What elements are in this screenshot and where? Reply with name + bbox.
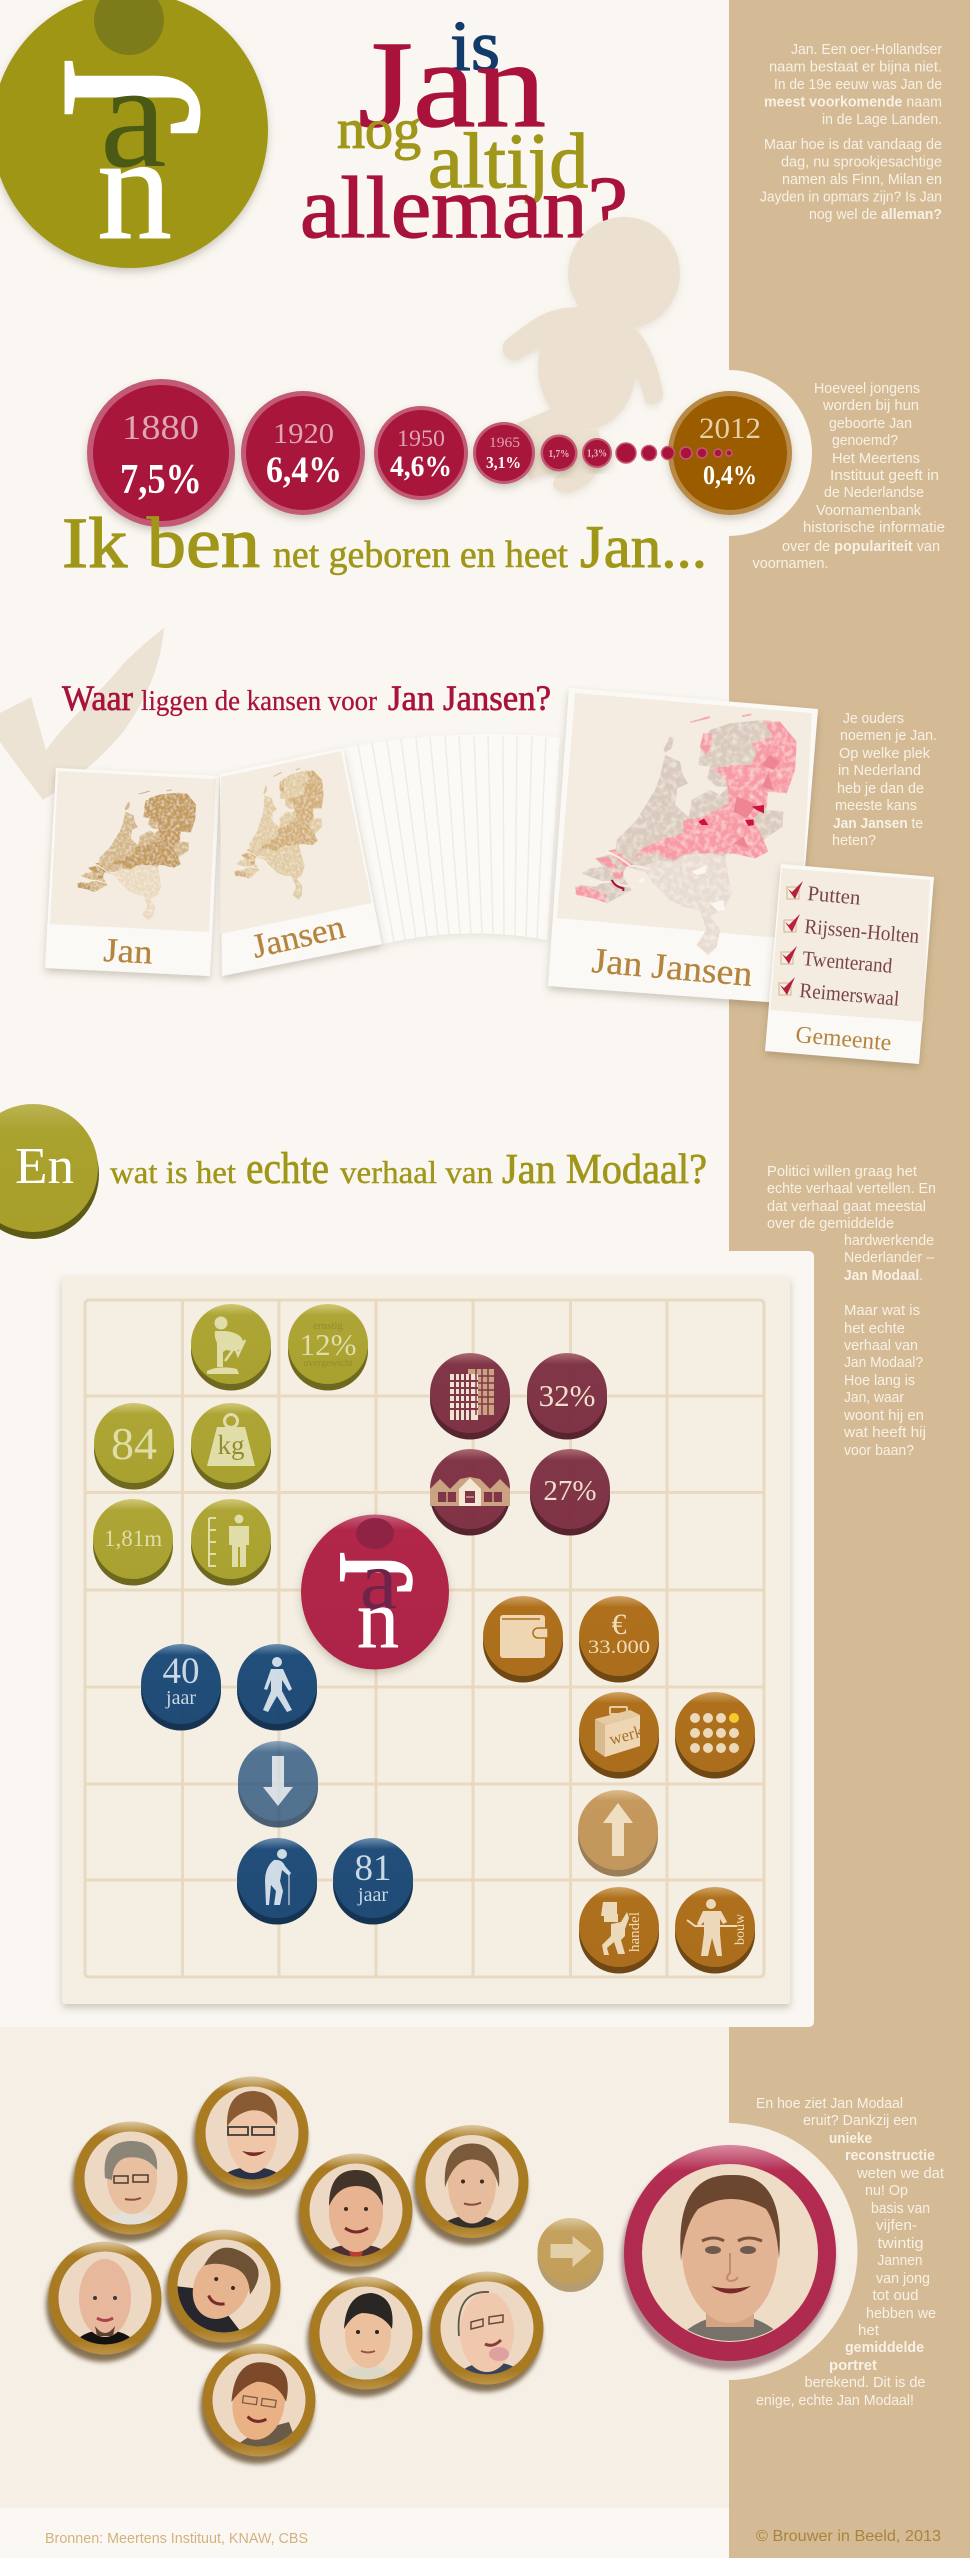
- Jan Modaal text: voor baan?: [844, 1442, 914, 1459]
- bubble 1965: 1965: [489, 435, 520, 451]
- heading: Ik ben net geboren: Ik ben: [62, 503, 260, 583]
- token: 81 jaar: 81: [354, 1848, 392, 1889]
- title: [300, 6, 628, 257]
- title: alleman?: [300, 160, 628, 257]
- map card: Jan Jansen: [548, 688, 818, 1004]
- portrait 1: grey-haired man with glasses: [72, 2122, 188, 2248]
- token: 12% ernstig overgewicht: overgewicht: [303, 1358, 353, 1369]
- chance text: meeste kans: [835, 797, 917, 814]
- heading: wat is het echte verhaal: wat is het: [110, 1154, 236, 1190]
- chance text: Je ouders: [843, 710, 904, 727]
- birth text: worden bij hun: [822, 397, 919, 414]
- portrait text: Jannen: [878, 2252, 922, 2269]
- heading: wat is het echte verhaal: echte: [246, 1144, 329, 1193]
- bubble 1,3%: 1,3%: [587, 448, 607, 460]
- heading: Ik ben net geboren: Jan...: [580, 514, 707, 580]
- intro text: [760, 41, 942, 223]
- Jan Modaal text: Jan Modaal?: [844, 1354, 923, 1371]
- bubble 1965: [473, 422, 535, 484]
- Jan Modaal text: verhaal van: [844, 1337, 918, 1354]
- token: bouw: [675, 1887, 755, 1974]
- card: Gemeente checklist: [765, 864, 934, 1064]
- token: 1,81m: 1,81m: [104, 1526, 162, 1551]
- map: Jan Jansen municipalities: [575, 714, 797, 955]
- chance text: Jan Jansen te: [833, 815, 923, 832]
- portrait text: nu! Op: [865, 2182, 908, 2199]
- portrait text: [756, 2095, 945, 2409]
- token: big Jan: [301, 1514, 449, 1670]
- token: handel: [579, 1887, 659, 1974]
- map card: Jansen: [220, 748, 382, 976]
- portrait 8: older bald man with glasses: [428, 2272, 544, 2394]
- portrait text: eruit? Dankzij een: [803, 2112, 917, 2129]
- birth text: over de populariteit van: [782, 538, 940, 555]
- Jan Modaal text: Politici willen graag het: [767, 1163, 918, 1180]
- Jan Modaal text: Jan Modaal.: [844, 1267, 923, 1284]
- bubble 1950: 1950: [397, 426, 445, 451]
- card: Gemeente checklist: Twenterand: [802, 946, 894, 978]
- Jan logo circle: a: [100, 33, 167, 199]
- bubble 2012: [668, 391, 792, 515]
- Jan Modaal text: dat verhaal gaat meestal: [767, 1198, 926, 1215]
- token: kg weight: kg: [218, 1430, 244, 1460]
- token: 32%: 32%: [539, 1378, 595, 1413]
- bubble 1920: [241, 391, 365, 515]
- token: income: [579, 1596, 659, 1682]
- token: 32%: [527, 1353, 607, 1440]
- token: werk briefcase: werk: [607, 1722, 645, 1749]
- Jan Modaal text: echte verhaal vertellen. En: [767, 1180, 936, 1197]
- portrait 2: young man with glasses: [193, 2076, 308, 2203]
- token: big Jan: n: [357, 1573, 399, 1666]
- token: 84: 84: [111, 1418, 157, 1469]
- Jan Modaal text: Maar wat is: [844, 1302, 920, 1319]
- token: big Jan: a: [360, 1534, 397, 1627]
- portrait 3: smiling man: [297, 2154, 412, 2280]
- side cut-out circle: portrait: [600, 2123, 858, 2380]
- icon: baby silhouette: [502, 217, 680, 493]
- Jan Modaal text: Hoe lang is: [844, 1372, 915, 1389]
- token: big Jan: J: [317, 1551, 435, 1593]
- portrait text: het: [858, 2322, 880, 2339]
- intro text: nog wel de alleman?: [809, 206, 942, 223]
- birth text: Instituut geeft in: [830, 467, 939, 484]
- portrait text: twintig: [878, 2235, 924, 2252]
- intro text: Maar hoe is dat vandaag de: [764, 136, 942, 153]
- intro text: dag, nu sprookjesachtige: [781, 154, 942, 170]
- birth text: de Nederlandse: [824, 484, 924, 501]
- token: 12% ernstig overgewicht: ernstig: [313, 1320, 343, 1332]
- bubble 2012: 2012: [699, 412, 761, 445]
- birth text: genoemd?: [832, 432, 898, 449]
- token: werk briefcase: [579, 1692, 659, 1778]
- icon: check marks: [779, 881, 803, 995]
- side cut-out circle: [646, 370, 812, 536]
- map: Jan distribution: [77, 789, 196, 920]
- portrait 9: man with tie: [200, 2344, 316, 2464]
- intro text: naam bestaat er bijna niet.: [769, 58, 942, 76]
- bubble 2012: 0,4%: [703, 460, 757, 490]
- portrait 7: young dark-haired man: [307, 2276, 422, 2401]
- birth text: Het Meertens: [832, 450, 920, 467]
- label: Gemeente: Gemeente: [794, 1022, 892, 1056]
- token: row houses: [430, 1449, 510, 1536]
- chance text: heten?: [832, 832, 876, 849]
- Jan Modaal text: hardwerkende: [844, 1232, 934, 1249]
- panel: board with grid: [62, 1276, 790, 2004]
- portrait text: berekend. Dit is de: [804, 2374, 926, 2391]
- heading: Ik ben net geboren: net geboren en heet: [273, 534, 568, 576]
- birth text: Hoeveel jongens: [814, 380, 920, 397]
- label: Jan Jansen: Jan Jansen: [590, 940, 754, 994]
- portrait text: vijfen-: [876, 2217, 917, 2234]
- Jan Modaal text: Nederlander –: [844, 1249, 935, 1266]
- title: is: [450, 6, 500, 86]
- title: Jan: [358, 16, 546, 153]
- label: Jansen: Jansen: [248, 909, 348, 966]
- token: belly icon: [191, 1304, 271, 1390]
- token: handel: handel: [627, 1912, 643, 1952]
- portrait text: gemiddelde: [845, 2339, 924, 2356]
- token: arrow up: [578, 1790, 658, 1876]
- bubble 1920: 1920: [273, 418, 334, 450]
- card: Gemeente checklist: Rijssen-Holten: [804, 914, 921, 948]
- Jan logo circle: [0, 0, 268, 271]
- portrait 6: tilted man: [165, 2230, 280, 2350]
- token: kg weight: [191, 1403, 271, 1490]
- arrow token: [538, 2218, 604, 2292]
- bubble 1,3%: [582, 438, 612, 468]
- bubble 1880: [87, 379, 235, 527]
- intro text: meest voorkomende naam: [764, 94, 942, 110]
- intro text: In de 19e eeuw was Jan de: [774, 76, 942, 93]
- token: bouw: bouw: [733, 1913, 748, 1945]
- token: 1,81m: [93, 1499, 173, 1586]
- token: apartment building: [430, 1353, 510, 1440]
- portrait text: En hoe ziet Jan Modaal: [756, 2095, 903, 2112]
- map card: Jan: [45, 768, 220, 976]
- token: 40 jaar: jaar: [165, 1687, 196, 1709]
- chance text: heb je dan de: [837, 780, 924, 797]
- fan of map cards: [343, 734, 560, 944]
- portrait text: van jong: [876, 2270, 930, 2287]
- bubble 1950: [374, 406, 468, 500]
- portrait text: enige, echte Jan Modaal!: [756, 2392, 914, 2409]
- chance text: [832, 710, 937, 849]
- token: walking man: [237, 1644, 317, 1730]
- Jan Modaal text: woont hij en: [843, 1407, 924, 1424]
- En badge: [0, 1104, 99, 1239]
- heading: Waar liggen de kansen: Waar: [62, 678, 133, 718]
- bubble 1965: 3,1%: [486, 453, 521, 472]
- Jan Modaal text: het echte: [844, 1320, 905, 1337]
- portrait text: basis van: [871, 2200, 930, 2217]
- face: [680, 2175, 780, 2341]
- portrait text: portret: [829, 2357, 877, 2374]
- portrait text: weten we dat: [856, 2165, 945, 2182]
- Jan Modaal text: over de gemiddelde: [767, 1215, 894, 1232]
- Jan Modaal text: Jan, waar: [844, 1389, 904, 1406]
- bubble 1920: 6,4%: [266, 450, 342, 491]
- bubble chart: share of boys named Jan: [87, 379, 792, 527]
- chance text: Op welke plek: [839, 745, 930, 762]
- heading: Waar liggen de kansen: [62, 678, 551, 718]
- token: income: 33.000: [588, 1637, 650, 1658]
- intro text: namen als Finn, Milan en: [782, 171, 942, 188]
- title: nog: [337, 99, 421, 161]
- bubble 1,7%: 1,7%: [548, 449, 570, 460]
- white panel: [0, 1251, 814, 2027]
- birth text: historische informatie: [803, 519, 945, 536]
- heading: wat is het echte verhaal: Jan Modaal?: [502, 1147, 707, 1193]
- Jan Modaal text: wat heeft hij: [843, 1424, 926, 1441]
- token: elderly man: [237, 1838, 317, 1924]
- title: altijd: [428, 117, 588, 204]
- icon: background check mark: [0, 628, 164, 800]
- bubble 1,7%: [540, 434, 578, 472]
- heading: Waar liggen de kansen: liggen de kansen voor: [141, 685, 377, 717]
- card: Gemeente checklist: Reimerswaal: [799, 978, 900, 1011]
- token: 81 jaar: jaar: [357, 1884, 388, 1906]
- portrait 4: man with tousled hair: [413, 2125, 528, 2252]
- birth text: geboorte Jan: [829, 415, 912, 432]
- portrait text: hebben we: [866, 2305, 936, 2322]
- intro text: Jayden in opmars zijn? Is Jan: [760, 188, 942, 206]
- token: wallet: [483, 1596, 563, 1682]
- token: employment dots: [675, 1692, 755, 1778]
- footer sources: Bronnen: Meertens Instituut, KNAW, CBS: [45, 2530, 308, 2547]
- heading: Waar liggen de kansen: Jan Jansen?: [388, 678, 551, 718]
- token: 12% ernstig overgewicht: 12%: [300, 1327, 356, 1362]
- label: Jan: Jan: [103, 932, 153, 972]
- map: Jansen distribution: [221, 765, 338, 908]
- token: 12% ernstig overgewicht: [288, 1304, 368, 1390]
- bubble 1880: 7,5%: [120, 457, 202, 503]
- card: Gemeente checklist: Putten: [807, 881, 862, 910]
- heading: Ik ben net geboren: [62, 503, 707, 583]
- Jan logo circle: n: [97, 105, 172, 271]
- token: 27%: 27%: [543, 1475, 597, 1507]
- heading: wat is het echte verhaal: [110, 1144, 707, 1193]
- footer copyright: © Brouwer in Beeld, 2013: [756, 2528, 941, 2545]
- heading: wat is het echte verhaal: verhaal van: [340, 1154, 493, 1190]
- token: 40 jaar: 40: [162, 1651, 200, 1692]
- bubble 1880: 1880: [122, 408, 199, 447]
- chance text: noemen je Jan.: [840, 727, 937, 744]
- Jan logo circle: J: [20, 58, 241, 136]
- portrait text: reconstructie: [845, 2147, 935, 2164]
- portrait text: tot oud: [872, 2287, 918, 2304]
- token: arrow down: [238, 1741, 318, 1828]
- token: income: €: [612, 1608, 626, 1641]
- portrait 5: bald man: [46, 2242, 162, 2374]
- birth text: voornamen.: [752, 555, 828, 572]
- intro text: in de Lage Landen.: [822, 111, 942, 128]
- intro text: Jan. Een oer-Hollandser: [791, 41, 942, 58]
- token: 81 jaar: [333, 1838, 413, 1924]
- birth text: [752, 380, 945, 572]
- Jan Modaal text: [767, 1163, 936, 1459]
- chance text: in Nederland: [838, 762, 921, 779]
- En badge: En: [15, 1138, 74, 1195]
- portrait text: unieke: [829, 2130, 872, 2147]
- token: height icon: [191, 1499, 271, 1586]
- trailing dots: [616, 443, 732, 463]
- token: 40 jaar: [141, 1644, 221, 1730]
- token: 27%: [530, 1449, 610, 1536]
- bubble 1950: 4,6%: [390, 450, 452, 483]
- birth text: Voornamenbank: [816, 502, 921, 519]
- portrait: average Jan Modaal: [621, 2145, 836, 2370]
- token: 84: [94, 1403, 174, 1490]
